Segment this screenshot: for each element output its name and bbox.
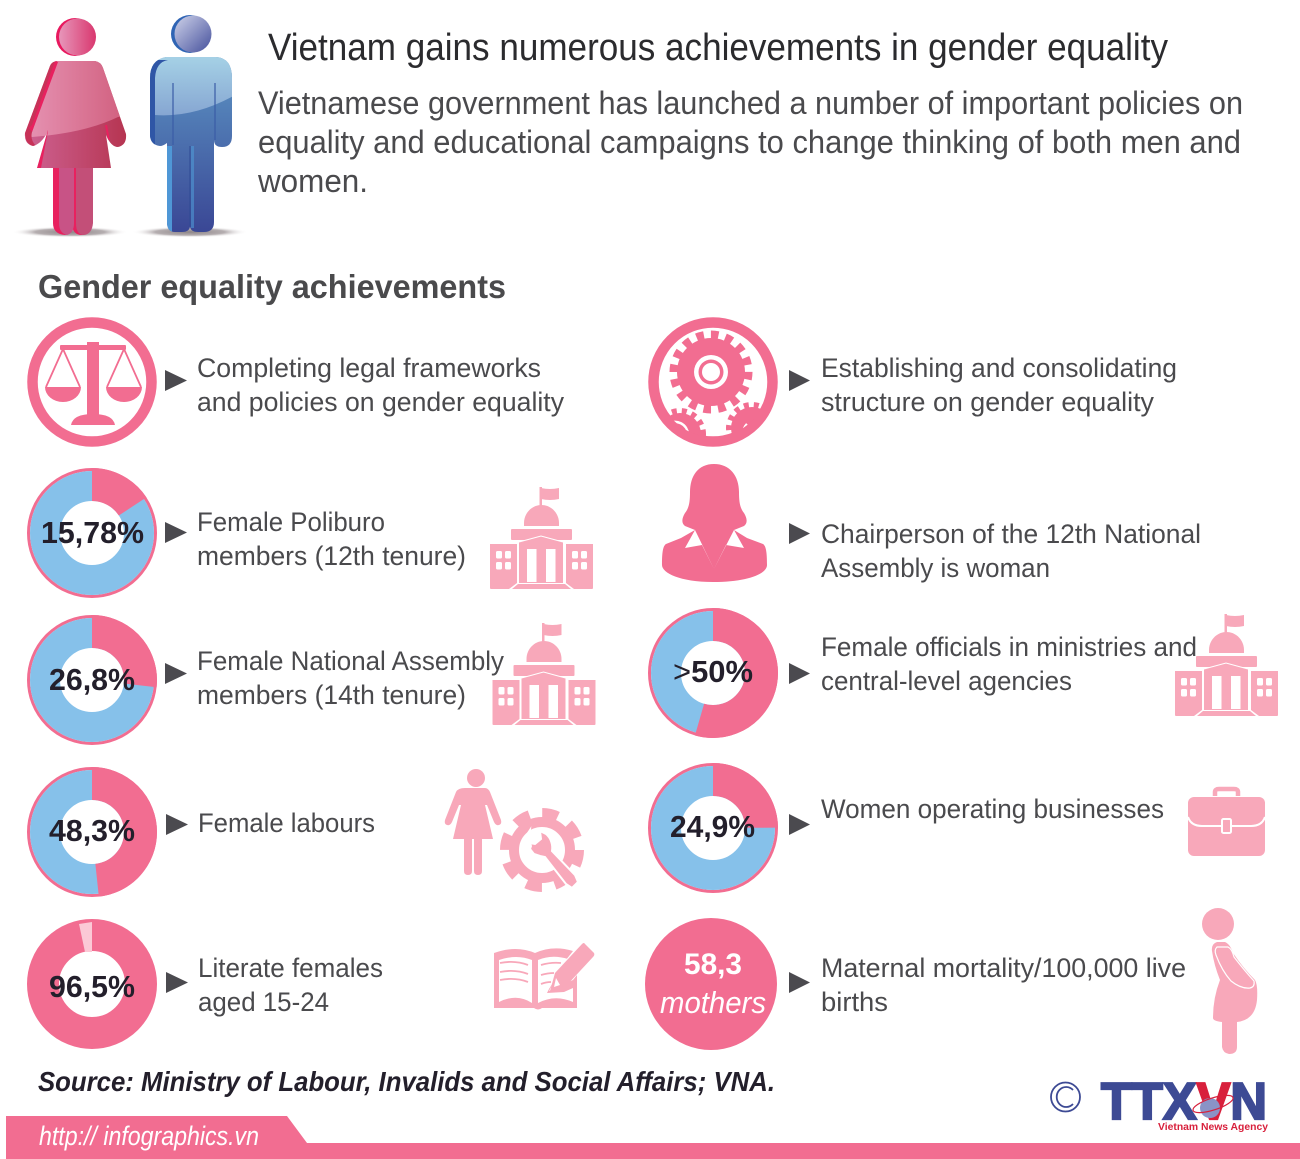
- text: Female National Assembly: [197, 646, 504, 676]
- donut chart 48,3%: 48,3%: [49, 813, 135, 848]
- text: members (12th tenure): [197, 541, 466, 571]
- icon: briefcase: [1188, 789, 1265, 856]
- text: Assembly is woman: [821, 553, 1050, 583]
- donut chart 24,9%: [650, 764, 776, 892]
- intro paragraph: Vietnamese government has launched a number of important policies on: [258, 85, 1243, 121]
- text: Female labours: [198, 808, 375, 838]
- text: [821, 632, 1197, 696]
- arrow: [166, 972, 188, 993]
- donut chart 96,5%: [43, 922, 141, 1033]
- text: [197, 507, 466, 571]
- text: [197, 353, 564, 417]
- logo: TTXVN Vietnam News Agency: TTXVN: [1101, 1073, 1267, 1131]
- panel: maternal mortality: [645, 908, 1257, 1054]
- intro paragraph: [257, 85, 1243, 199]
- arrow: [165, 663, 187, 684]
- arrow: [789, 523, 810, 544]
- arrow: [165, 522, 187, 543]
- donut chart >50%: [650, 610, 776, 736]
- panel: female politburo members: [28, 470, 593, 596]
- text: structure on gender equality: [821, 387, 1154, 417]
- panel: literate females: [43, 922, 594, 1033]
- donut chart 15,78%: 15,78%: [41, 515, 144, 550]
- icon: woman and gear with wrench: [445, 769, 579, 888]
- arrow: [789, 663, 810, 684]
- donut chart 15,78%: [28, 470, 156, 596]
- icon: government building: [1175, 614, 1278, 716]
- source note: Source: Ministry of Labour, Invalids and Social Affairs; VNA.: [38, 1066, 775, 1097]
- panel: female officials: [650, 610, 1278, 736]
- text: Female officials in ministries and: [821, 632, 1197, 662]
- text: [821, 519, 1201, 583]
- text: [198, 953, 383, 1017]
- panel: women operating businesses: [650, 764, 1265, 892]
- text: members (14th tenure): [197, 680, 466, 710]
- icon: gears: [654, 322, 775, 457]
- footer bar: [6, 1116, 1300, 1159]
- arrow: [789, 370, 810, 391]
- donut chart 26,8%: 26,8%: [49, 662, 135, 697]
- donut chart 26,8%: [28, 616, 156, 744]
- icon: government building: [492, 623, 596, 725]
- panel: legal frameworks: [32, 322, 564, 442]
- heading: Gender equality achievements: [38, 268, 506, 305]
- text: Establishing and consolidating: [821, 353, 1177, 383]
- text: Maternal mortality/100,000 live: [821, 953, 1186, 983]
- arrow: [165, 370, 187, 391]
- text: Female Poliburo: [197, 507, 385, 537]
- text: [821, 353, 1177, 417]
- text: [197, 646, 504, 710]
- icon: female and male figures: [12, 15, 248, 240]
- icon: pregnant woman: [1202, 908, 1257, 1054]
- donut chart >50%: >50%: [673, 654, 753, 689]
- donut chart 96,5%: 96,5%: [49, 969, 135, 1004]
- title: Vietnam gains numerous achievements in gender equality: [268, 27, 1168, 69]
- badge: 58,3 mothers: 58,3: [684, 948, 742, 981]
- donut chart 24,9%: 24,9%: [670, 809, 755, 844]
- text: and policies on gender equality: [197, 387, 564, 417]
- logo: TTXVN Vietnam News Agency: Vietnam News Agency: [1158, 1121, 1268, 1133]
- icon: scales of justice: [32, 322, 152, 442]
- panel: chairperson: [662, 464, 1201, 583]
- text: Completing legal frameworks: [197, 353, 541, 383]
- intro paragraph: women.: [257, 163, 368, 199]
- text: [821, 953, 1186, 1017]
- text: central-level agencies: [821, 666, 1072, 696]
- badge: 58,3 mothers: [645, 918, 777, 1050]
- donut chart 48,3%: [28, 768, 156, 896]
- text: aged 15-24: [198, 987, 329, 1017]
- panel: structure on gender equality: [654, 322, 1177, 457]
- icon: businesswoman: [662, 464, 767, 582]
- icon: government building: [490, 487, 593, 589]
- arrow: [789, 814, 810, 835]
- intro paragraph: equality and educational campaigns to change thinking of both men and: [258, 124, 1241, 160]
- text: Chairperson of the 12th National: [821, 519, 1201, 549]
- badge: 58,3 mothers: mothers: [660, 985, 766, 1020]
- panel: female national assembly members: [28, 616, 596, 744]
- text: births: [821, 987, 888, 1017]
- icon: open book and pencil: [494, 943, 594, 1010]
- text: Literate females: [198, 953, 383, 983]
- arrow: [789, 972, 810, 993]
- panel: female labours: [28, 768, 579, 896]
- copyright symbol: [1051, 1082, 1080, 1112]
- footer bar: http:// infographics.vn: [39, 1121, 259, 1151]
- text: Women operating businesses: [821, 794, 1164, 824]
- arrow: [166, 814, 188, 835]
